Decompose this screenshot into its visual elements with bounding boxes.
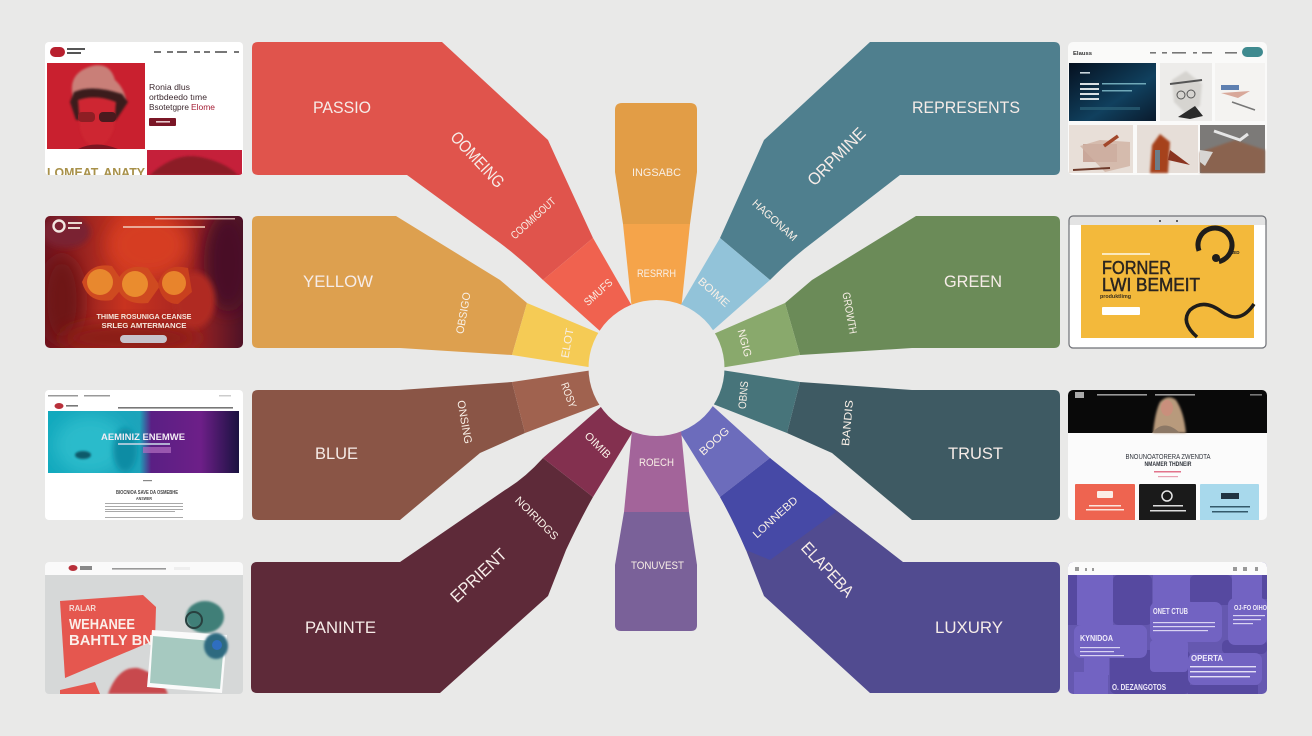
thumbnail: teal purple banner site xyxy=(45,390,243,520)
label: green outer: GROWTH xyxy=(839,291,859,335)
label: yellow outer: OBSIGO xyxy=(454,291,474,335)
sketch card xyxy=(1221,85,1256,111)
thumbnail: dark red hand site: SRLEG AMTERMANCE xyxy=(102,321,186,330)
label: teal outer: ORPMINE xyxy=(804,124,870,190)
sketch portrait xyxy=(1160,63,1212,121)
button xyxy=(120,335,167,343)
thumbnail: teal purple banner site: ANSWER xyxy=(136,496,153,501)
label: orange inner: RESRRH xyxy=(637,268,676,280)
label: indigo middle: LONNEBD xyxy=(751,495,801,541)
label: green: GREEN xyxy=(944,272,1002,291)
bottom image right xyxy=(1200,125,1265,173)
headline: Ronia dlus xyxy=(149,82,190,92)
thumbnail: red portrait site: Elome xyxy=(191,102,215,112)
label: indigo inner: BOOG xyxy=(697,425,732,458)
thumbnail: red portrait site: ortbdeedo tıme xyxy=(149,92,207,102)
panel: orange xyxy=(615,103,697,320)
yellow hero: LWI BEMEIT xyxy=(1102,275,1200,295)
light blocks xyxy=(1074,575,1267,694)
panel: passion (red) xyxy=(252,42,640,340)
card: black xyxy=(1139,484,1196,521)
label: maroon name: PANINTE xyxy=(305,618,376,637)
heading: BNOUNOATORERA ZWENDTA xyxy=(1126,454,1211,461)
hero text: THIME ROSUNIGA CEANSE xyxy=(96,312,192,321)
button xyxy=(149,118,176,126)
label: brown outer: ONSING xyxy=(454,399,474,445)
label: slate outer: BANDIS xyxy=(840,400,856,447)
block: heading two: ONET CTUB xyxy=(1153,607,1188,616)
yellow hero xyxy=(1081,223,1254,338)
gold headline: LOMEAT. ANATY xyxy=(47,165,145,180)
block: heading four: OPERTA xyxy=(1191,654,1223,663)
yellow hero: produktlimg xyxy=(1100,294,1131,300)
thumbnail: purple blocks site xyxy=(1068,562,1267,694)
label: yellow: YELLOW xyxy=(303,272,373,291)
thumbnail: red portrait site xyxy=(45,42,243,180)
banner: AEMINIZ ENEMWE xyxy=(101,432,186,443)
device xyxy=(147,601,228,693)
label: purple outer: TONUVEST xyxy=(631,560,684,572)
article text: BIOCNIOA SAVE DA OSMEBHE xyxy=(116,490,179,496)
label: yellow inner: ELOT xyxy=(559,327,577,359)
thumbnail: black header site xyxy=(1068,390,1267,521)
icon: logo xyxy=(68,565,78,571)
centre circle xyxy=(588,300,724,436)
block: heading three: OJ-FO OIHO xyxy=(1234,603,1267,612)
bottom image left xyxy=(1069,125,1133,173)
label: green inner: NGIG xyxy=(735,328,753,358)
panel: luxury (indigo) xyxy=(672,390,1060,693)
label: indigo outer: ELAPEBA xyxy=(797,538,858,601)
wordmark: Elauss xyxy=(1073,51,1092,57)
coral shape: WEHANEE xyxy=(69,616,135,633)
label: maroon outer: EPRIENT xyxy=(447,545,511,606)
thumbnail: gallery site xyxy=(1068,42,1267,175)
label: maroon middle: NOIRIDGS xyxy=(512,495,560,543)
label: orange outer: INGSABC xyxy=(632,167,681,179)
dark image xyxy=(1069,63,1156,121)
orange fingertips xyxy=(82,265,192,304)
thumbnail: yellow tablet site xyxy=(1069,216,1266,348)
label: red middle: COOMIGOUT xyxy=(509,195,559,242)
panel: maroon xyxy=(251,390,640,693)
label: luxury: LUXURY xyxy=(935,618,1003,637)
label: teal inner: BOIME xyxy=(695,276,731,310)
thumbnail: coral collage site xyxy=(45,562,243,694)
label: purple inner: ROECH xyxy=(639,457,674,469)
label: maroon inner: OIMIB xyxy=(582,430,613,461)
block: heading one: KYNIDOA xyxy=(1080,634,1113,643)
panel: represents (teal) xyxy=(672,42,1060,340)
label: passion: PASSIO xyxy=(313,98,371,117)
lower image xyxy=(147,150,242,175)
icon: logo xyxy=(54,220,64,232)
button xyxy=(1242,47,1263,57)
card: light blue xyxy=(1200,484,1259,521)
yellow hero: FORNER xyxy=(1102,258,1171,278)
coral shape xyxy=(60,595,156,694)
portrait xyxy=(1152,397,1186,433)
panel: trust (slate) xyxy=(695,366,1060,520)
panel: yellow xyxy=(252,216,620,372)
label: trust: TRUST xyxy=(948,444,1003,463)
banner xyxy=(48,411,239,475)
thumbnail: dark red hand site xyxy=(45,216,243,348)
coral shape: RALAR xyxy=(69,604,96,613)
coral shape: BAHTLY BN xyxy=(69,632,153,649)
label: brown inner: ROSY xyxy=(558,381,578,410)
panel: green xyxy=(695,216,1060,372)
bottom image middle xyxy=(1137,125,1198,173)
block: footer heading: O. DEZANGOTOS xyxy=(1112,683,1167,692)
dark blocks xyxy=(1068,575,1267,694)
panel: purple xyxy=(615,420,697,631)
label: red outer: OOMEING xyxy=(447,128,508,192)
label: slate inner: OBNS xyxy=(737,381,751,410)
icon: logo xyxy=(50,47,65,57)
label: red inner: SMUFS xyxy=(582,277,615,309)
label: represents: REPRESENTS xyxy=(912,98,1020,117)
thumbnail: black header site: NMAMER THDNEIR xyxy=(1144,461,1192,468)
panel: blue (brown) xyxy=(252,366,620,520)
portrait image xyxy=(47,63,145,149)
thumbnail: red portrait site: Bsotetgpre xyxy=(149,102,189,112)
label: blue: BLUE xyxy=(315,444,358,463)
icon: logo xyxy=(54,403,64,409)
label: teal middle: HAGONAM xyxy=(750,198,799,244)
card: coral xyxy=(1075,484,1135,521)
yellow hero: RED xyxy=(1230,250,1240,255)
